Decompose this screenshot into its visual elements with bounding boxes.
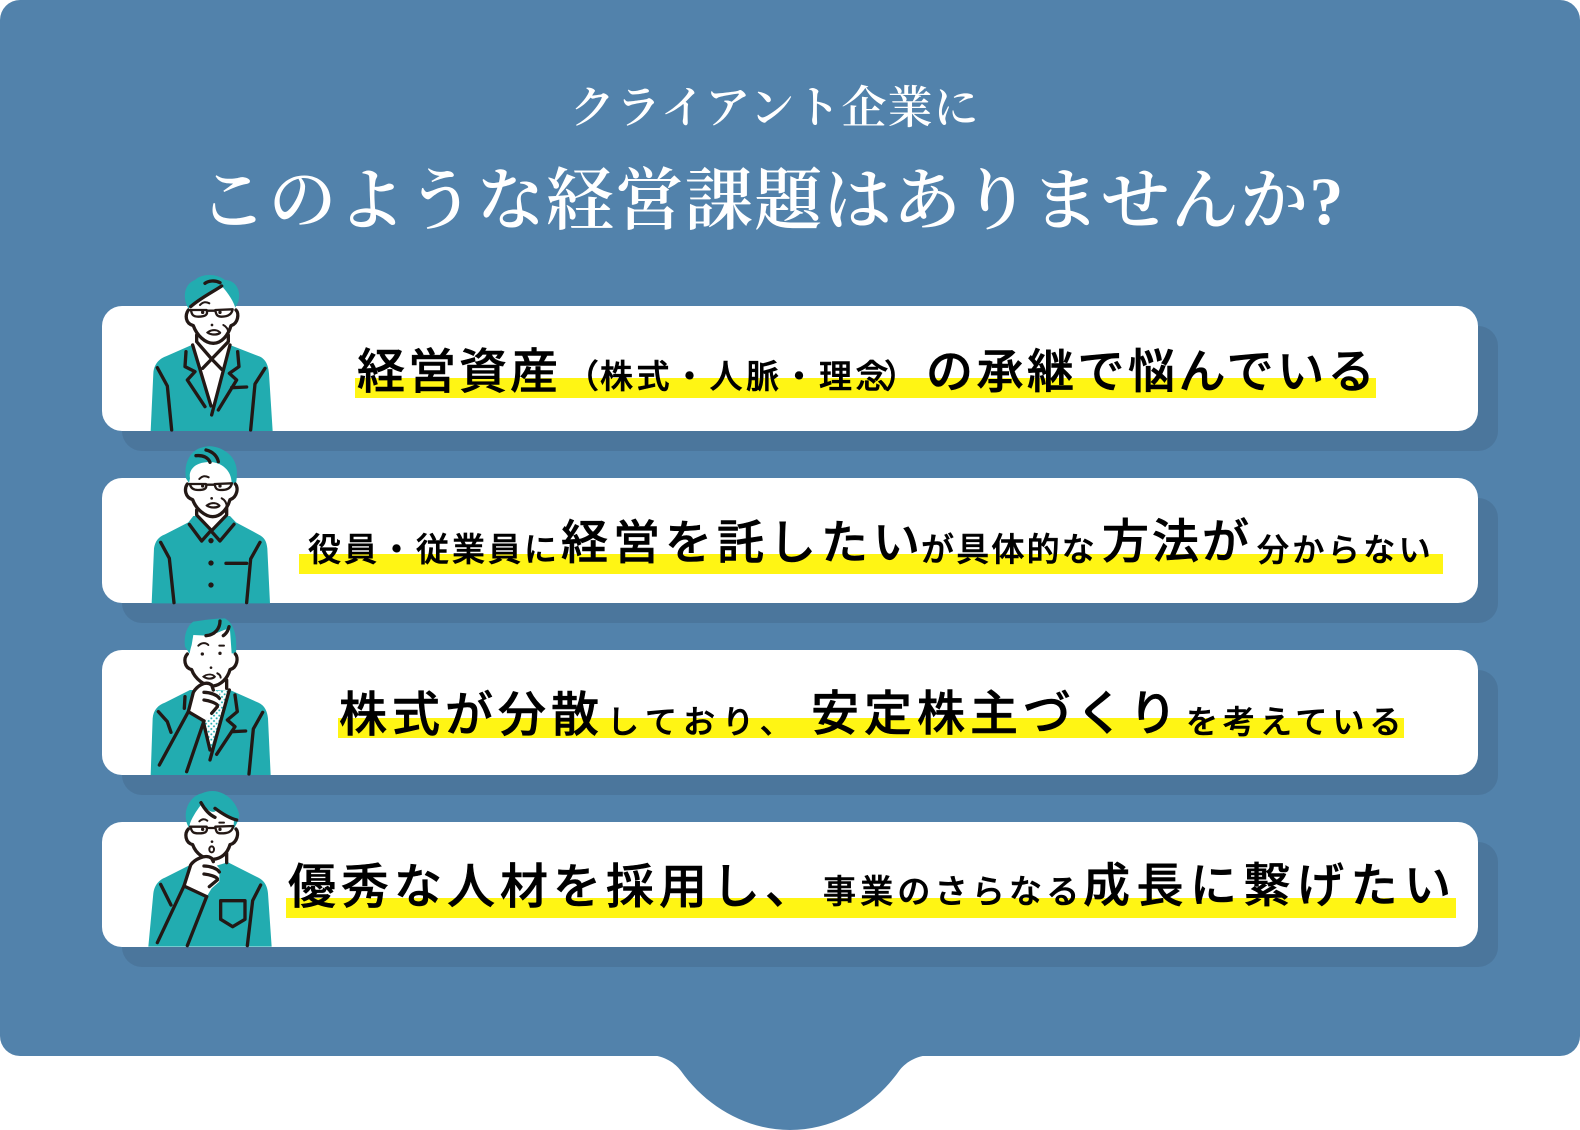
title line 2: このような経営課題はありませんか? [199, 163, 1345, 239]
row 4 text [288, 859, 1458, 914]
panel: row 3 [102, 650, 1498, 795]
row 2 text: 方法が [1102, 515, 1252, 568]
panel: row 1 [102, 306, 1498, 451]
row 1 text: の承継で悩んでいる [926, 345, 1378, 398]
panel: row 4 [102, 822, 1498, 967]
row 4 text: 成長に繋げたい [1083, 859, 1458, 912]
icon: worried man in shirt with glasses [152, 446, 270, 603]
row 3 text: しており、 [607, 704, 799, 740]
row 2 text: 役員・従業員に [308, 531, 560, 568]
icon: thoughtful young man with glasses and pocket shirt [148, 791, 272, 947]
row 3 text: 安定株主づくり [811, 688, 1182, 741]
row 3 text [339, 688, 1406, 742]
title [199, 83, 1345, 239]
icon: thinking man in suit with hand on chin [151, 618, 271, 775]
row 2 text: 経営を託したい [561, 516, 925, 569]
row 4 text: 事業のさらなる [823, 873, 1083, 910]
row 2 text [308, 515, 1434, 569]
row 1 text: 経営資産 [357, 346, 561, 399]
title line 1: クライアント企業に [570, 83, 980, 133]
row 1 text: （ [566, 358, 599, 395]
row 1 text: 株式・人脈・理念 [600, 358, 892, 395]
row 4 text: 優秀な人材を採用し、 [288, 861, 818, 914]
row 2 text: 分からない [1257, 532, 1434, 568]
row 1 text: ） [884, 358, 917, 395]
row 1 text [357, 345, 1378, 399]
row 3 text: 株式が分散 [339, 689, 604, 742]
icon: worried man in suit with glasses [151, 275, 273, 431]
panel: row 2 [102, 478, 1498, 623]
row 3 text: を考えている [1186, 704, 1406, 740]
row 2 text: が具体的な [921, 531, 1097, 568]
